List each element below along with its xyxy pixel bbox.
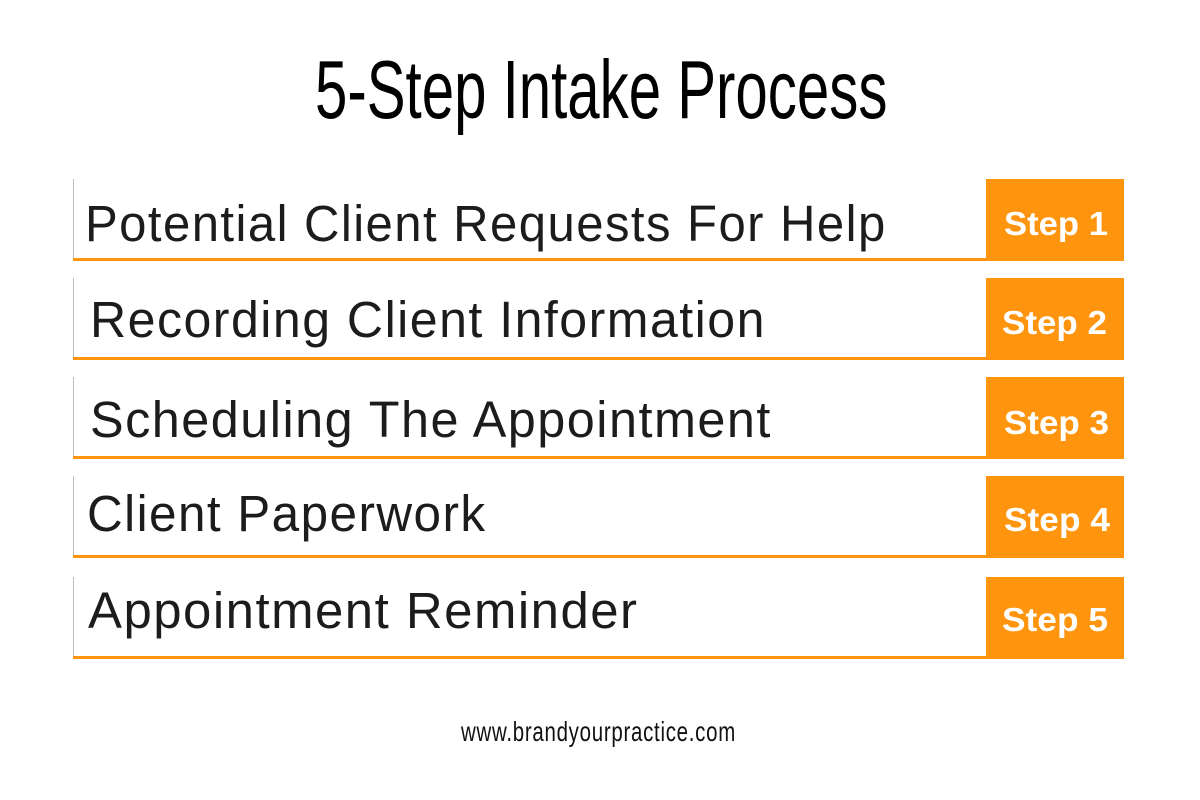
step 5 row xyxy=(73,577,1124,659)
step 1 badge xyxy=(986,179,1124,261)
step 3 badge xyxy=(986,377,1124,459)
step 5 badge xyxy=(986,577,1124,659)
step 2 badge: Step 2 xyxy=(1002,304,1107,341)
step 2 badge xyxy=(986,278,1124,360)
step 4 badge: Step 4 xyxy=(1004,501,1110,538)
step 2 row xyxy=(73,278,1124,360)
step 2 text: Recording Client Information xyxy=(90,291,766,348)
step 5 badge: Step 5 xyxy=(1002,601,1108,638)
website footer: www.brandyourpractice.com xyxy=(461,716,736,747)
step 4 row xyxy=(73,476,1124,558)
step 3 row xyxy=(73,377,1124,459)
step 4 badge xyxy=(986,476,1124,558)
step 4 text: Client Paperwork xyxy=(87,485,487,542)
step 5 text: Appointment Reminder xyxy=(88,582,639,639)
title: 5-Step Intake Process xyxy=(315,43,887,136)
step 1 text: Potential Client Requests For Help xyxy=(85,195,887,252)
step 1 badge: Step 1 xyxy=(1004,205,1108,242)
step 1 row xyxy=(73,179,1124,261)
step 3 text: Scheduling The Appointment xyxy=(90,391,772,448)
step 3 badge: Step 3 xyxy=(1004,404,1109,441)
